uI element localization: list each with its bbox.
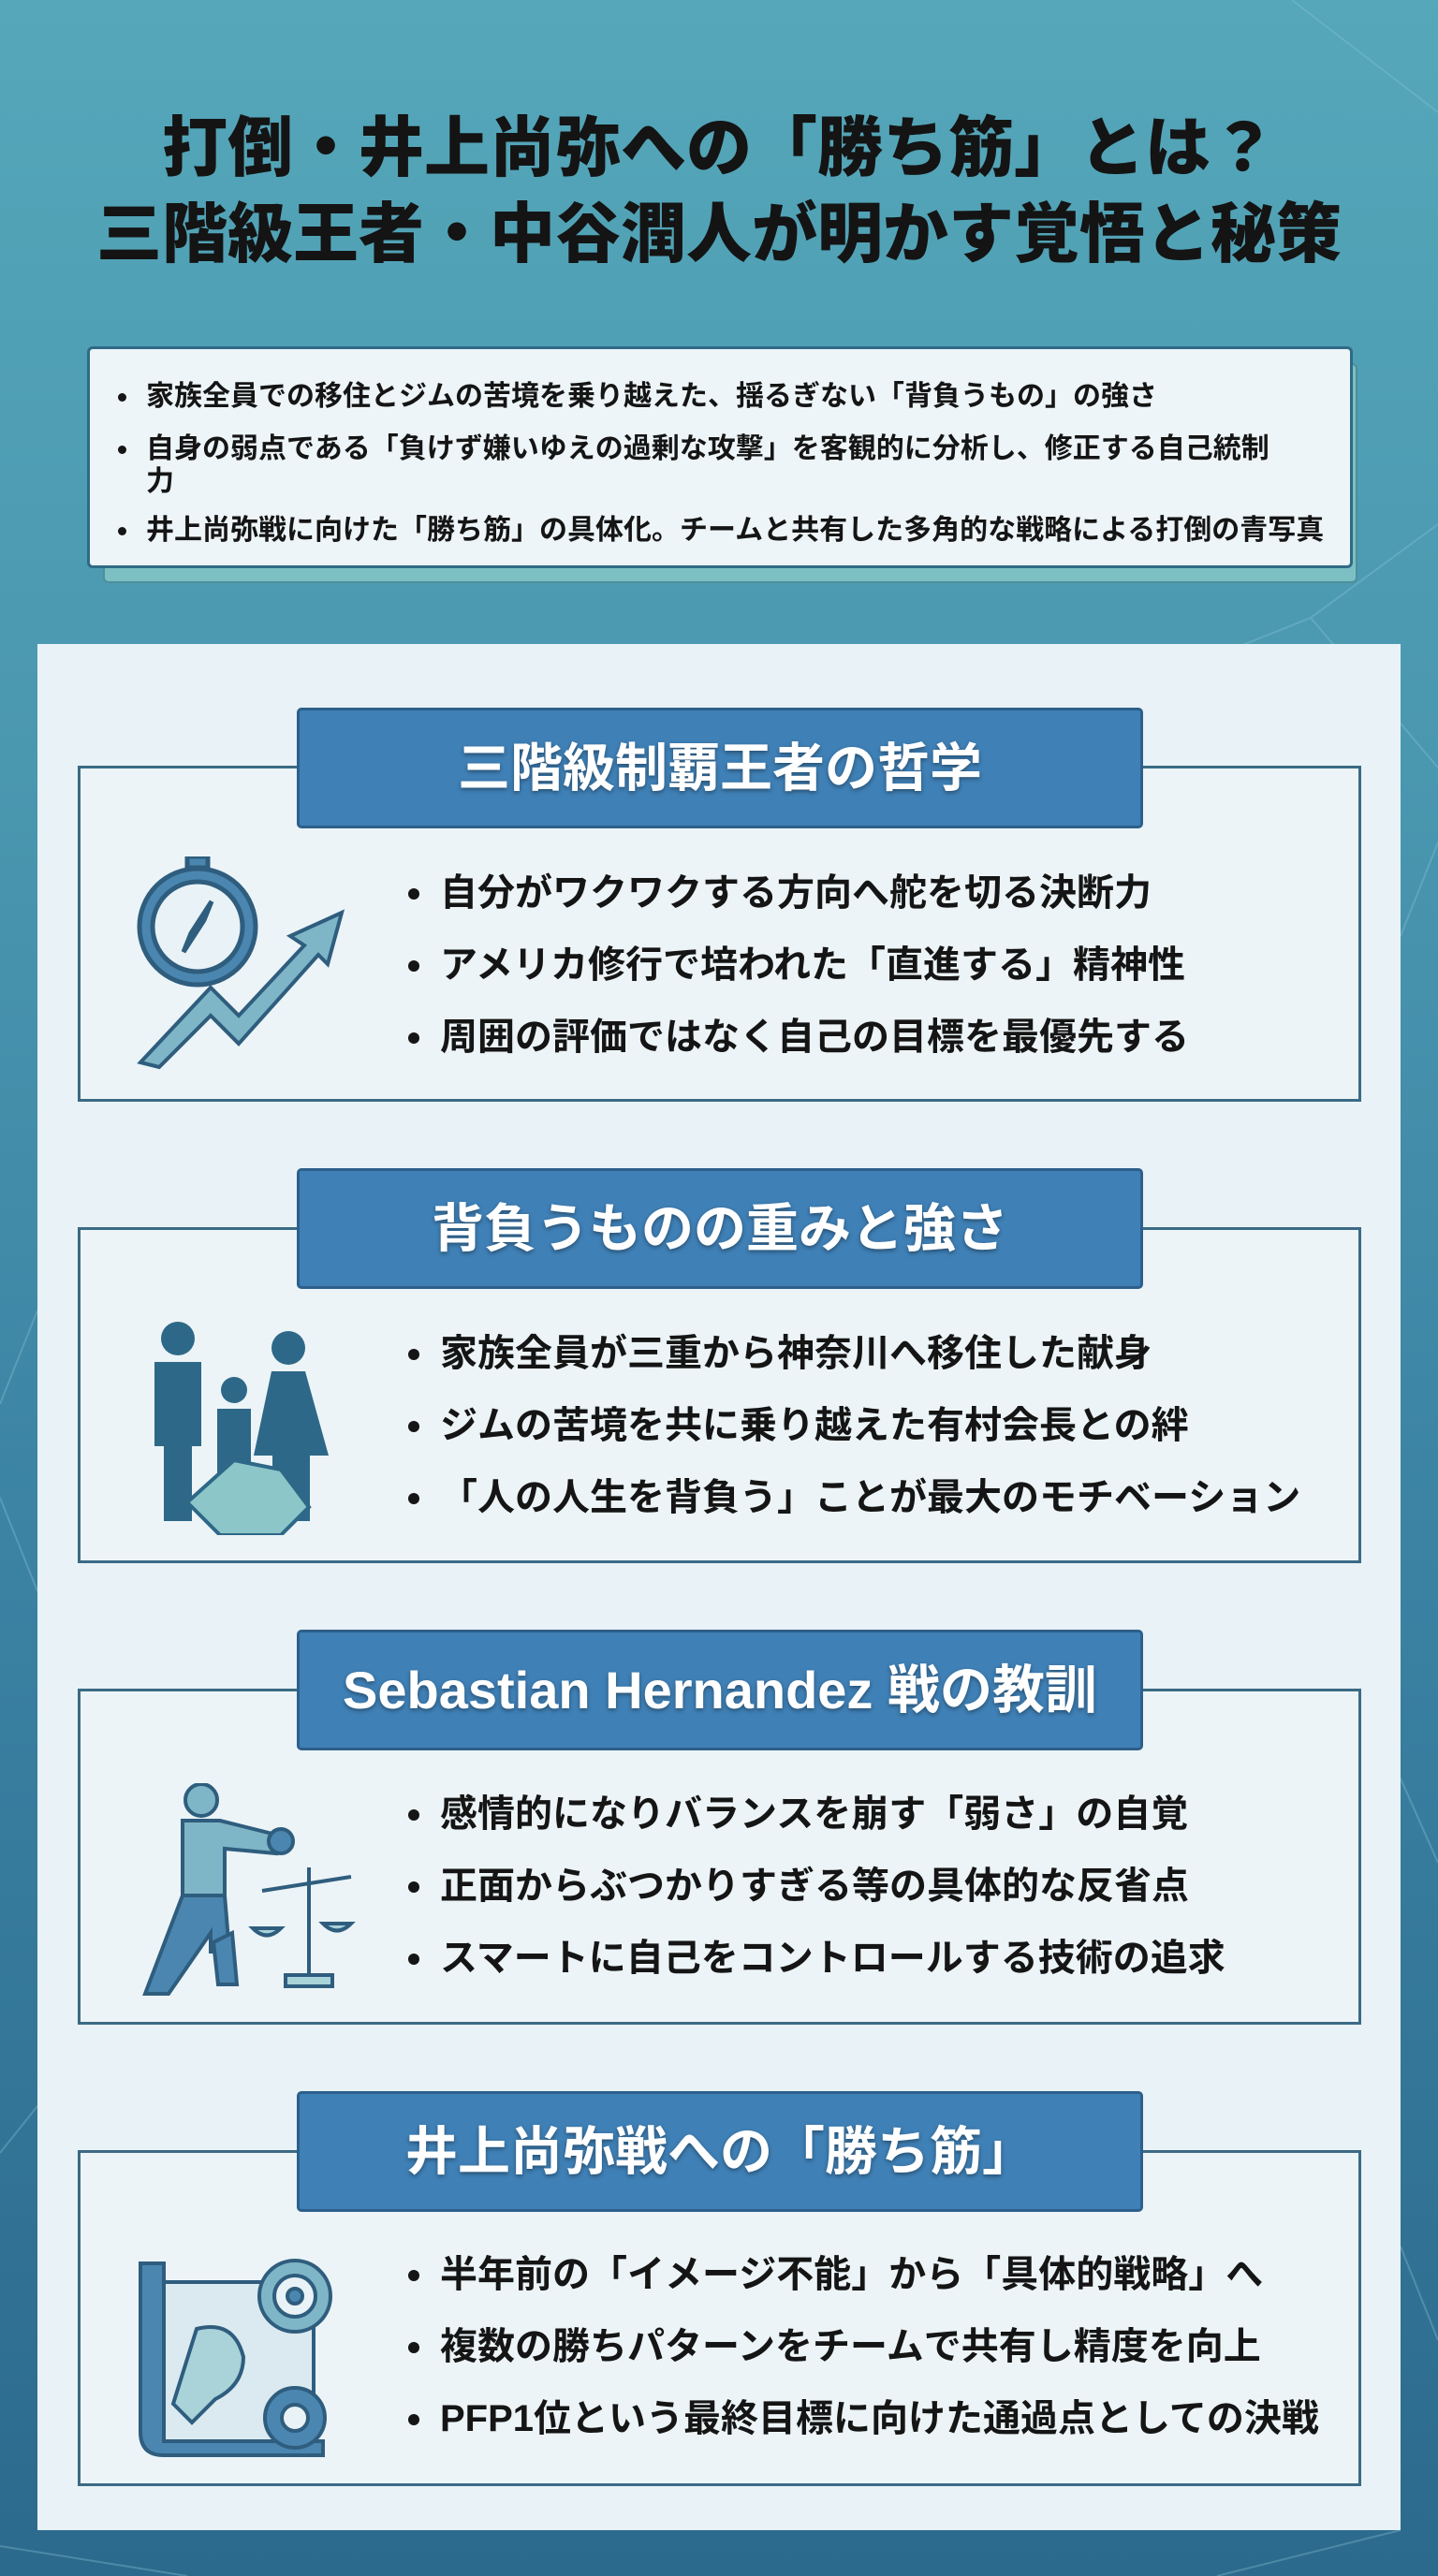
panel 2 bullets: ジムの苦境を共に乗り越えた有村会長との絆 [440, 1405, 1189, 1446]
panel 4 bullets: PFP1位という最終目標に向けた通過点としての決戦 [440, 2398, 1319, 2439]
panel 4 header [297, 2091, 1143, 2212]
icon: compass and arrow [137, 856, 345, 1069]
panel 3 bullets [408, 1793, 1225, 1979]
panel 3 header: Sebastian Hernandez 戦の教訓 [343, 1661, 1097, 1720]
panel 2 bullets: 家族全員が三重から神奈川へ移住した献身 [440, 1333, 1152, 1374]
panel 3 box [78, 1689, 1361, 2025]
panel 1 box [78, 766, 1361, 1102]
summary shadow [103, 363, 1357, 583]
title: 打倒・井上尚弥への「勝ち筋」とは？ [162, 111, 1276, 184]
icon: boxer and scale [142, 1783, 356, 1996]
summary box: 家族全員での移住とジムの苦境を乗り越えた、揺るぎない「背負うもの」の強さ [146, 381, 1157, 412]
panel 3 header [297, 1630, 1143, 1750]
panel 2 box [78, 1227, 1361, 1563]
main panel [37, 644, 1401, 2530]
panel 1 bullets [408, 872, 1189, 1058]
panel 2 header [297, 1168, 1143, 1289]
panel 2 bullets [408, 1333, 1300, 1518]
panel 2 header: 背負うものの重みと強さ [432, 1199, 1008, 1258]
panel 1 bullets: 自分がワクワクする方向へ舵を切る決断力 [440, 872, 1152, 914]
panel 1 bullets: 周囲の評価ではなく自己の目標を最優先する [440, 1017, 1189, 1058]
title: 三階級王者・中谷潤人が明かす覚悟と秘策 [96, 198, 1342, 271]
icon: blueprint target glove gear [139, 2259, 332, 2457]
panel 4 bullets [408, 2254, 1319, 2439]
icon: family with handshake [154, 1322, 329, 1535]
summary box: 力 [146, 466, 174, 497]
panel 4 bullets: 複数の勝ちパターンをチームで共有し精度を向上 [440, 2326, 1261, 2367]
summary box: 井上尚弥戦に向けた「勝ち筋」の具体化。チームと共有した多角的な戦略による打倒の青写真 [146, 515, 1324, 546]
panel 3 bullets: スマートに自己をコントロールする技術の追求 [440, 1938, 1225, 1979]
summary box [87, 346, 1353, 568]
title [96, 111, 1342, 271]
panel 1 bullets: アメリカ修行で培われた「直進する」精神性 [440, 944, 1185, 986]
panel 1 header [297, 708, 1143, 828]
panel 4 header: 井上尚弥戦への「勝ち筋」 [405, 2122, 1034, 2181]
panel 1 header: 三階級制覇王者の哲学 [458, 739, 982, 798]
panel 3 bullets: 感情的になりバランスを崩す「弱さ」の自覚 [440, 1793, 1188, 1835]
panel 4 bullets: 半年前の「イメージ不能」から「具体的戦略」へ [440, 2254, 1263, 2295]
summary box: 自身の弱点である「負けず嫌いゆえの過剰な攻撃」を客観的に分析し、修正する自己統制 [146, 433, 1269, 464]
panel 4 box [78, 2150, 1361, 2486]
panel 3 bullets: 正面からぶつかりすぎる等の具体的な反省点 [440, 1866, 1189, 1907]
panel 2 bullets: 「人の人生を背負う」ことが最大のモチベーション [440, 1477, 1300, 1518]
